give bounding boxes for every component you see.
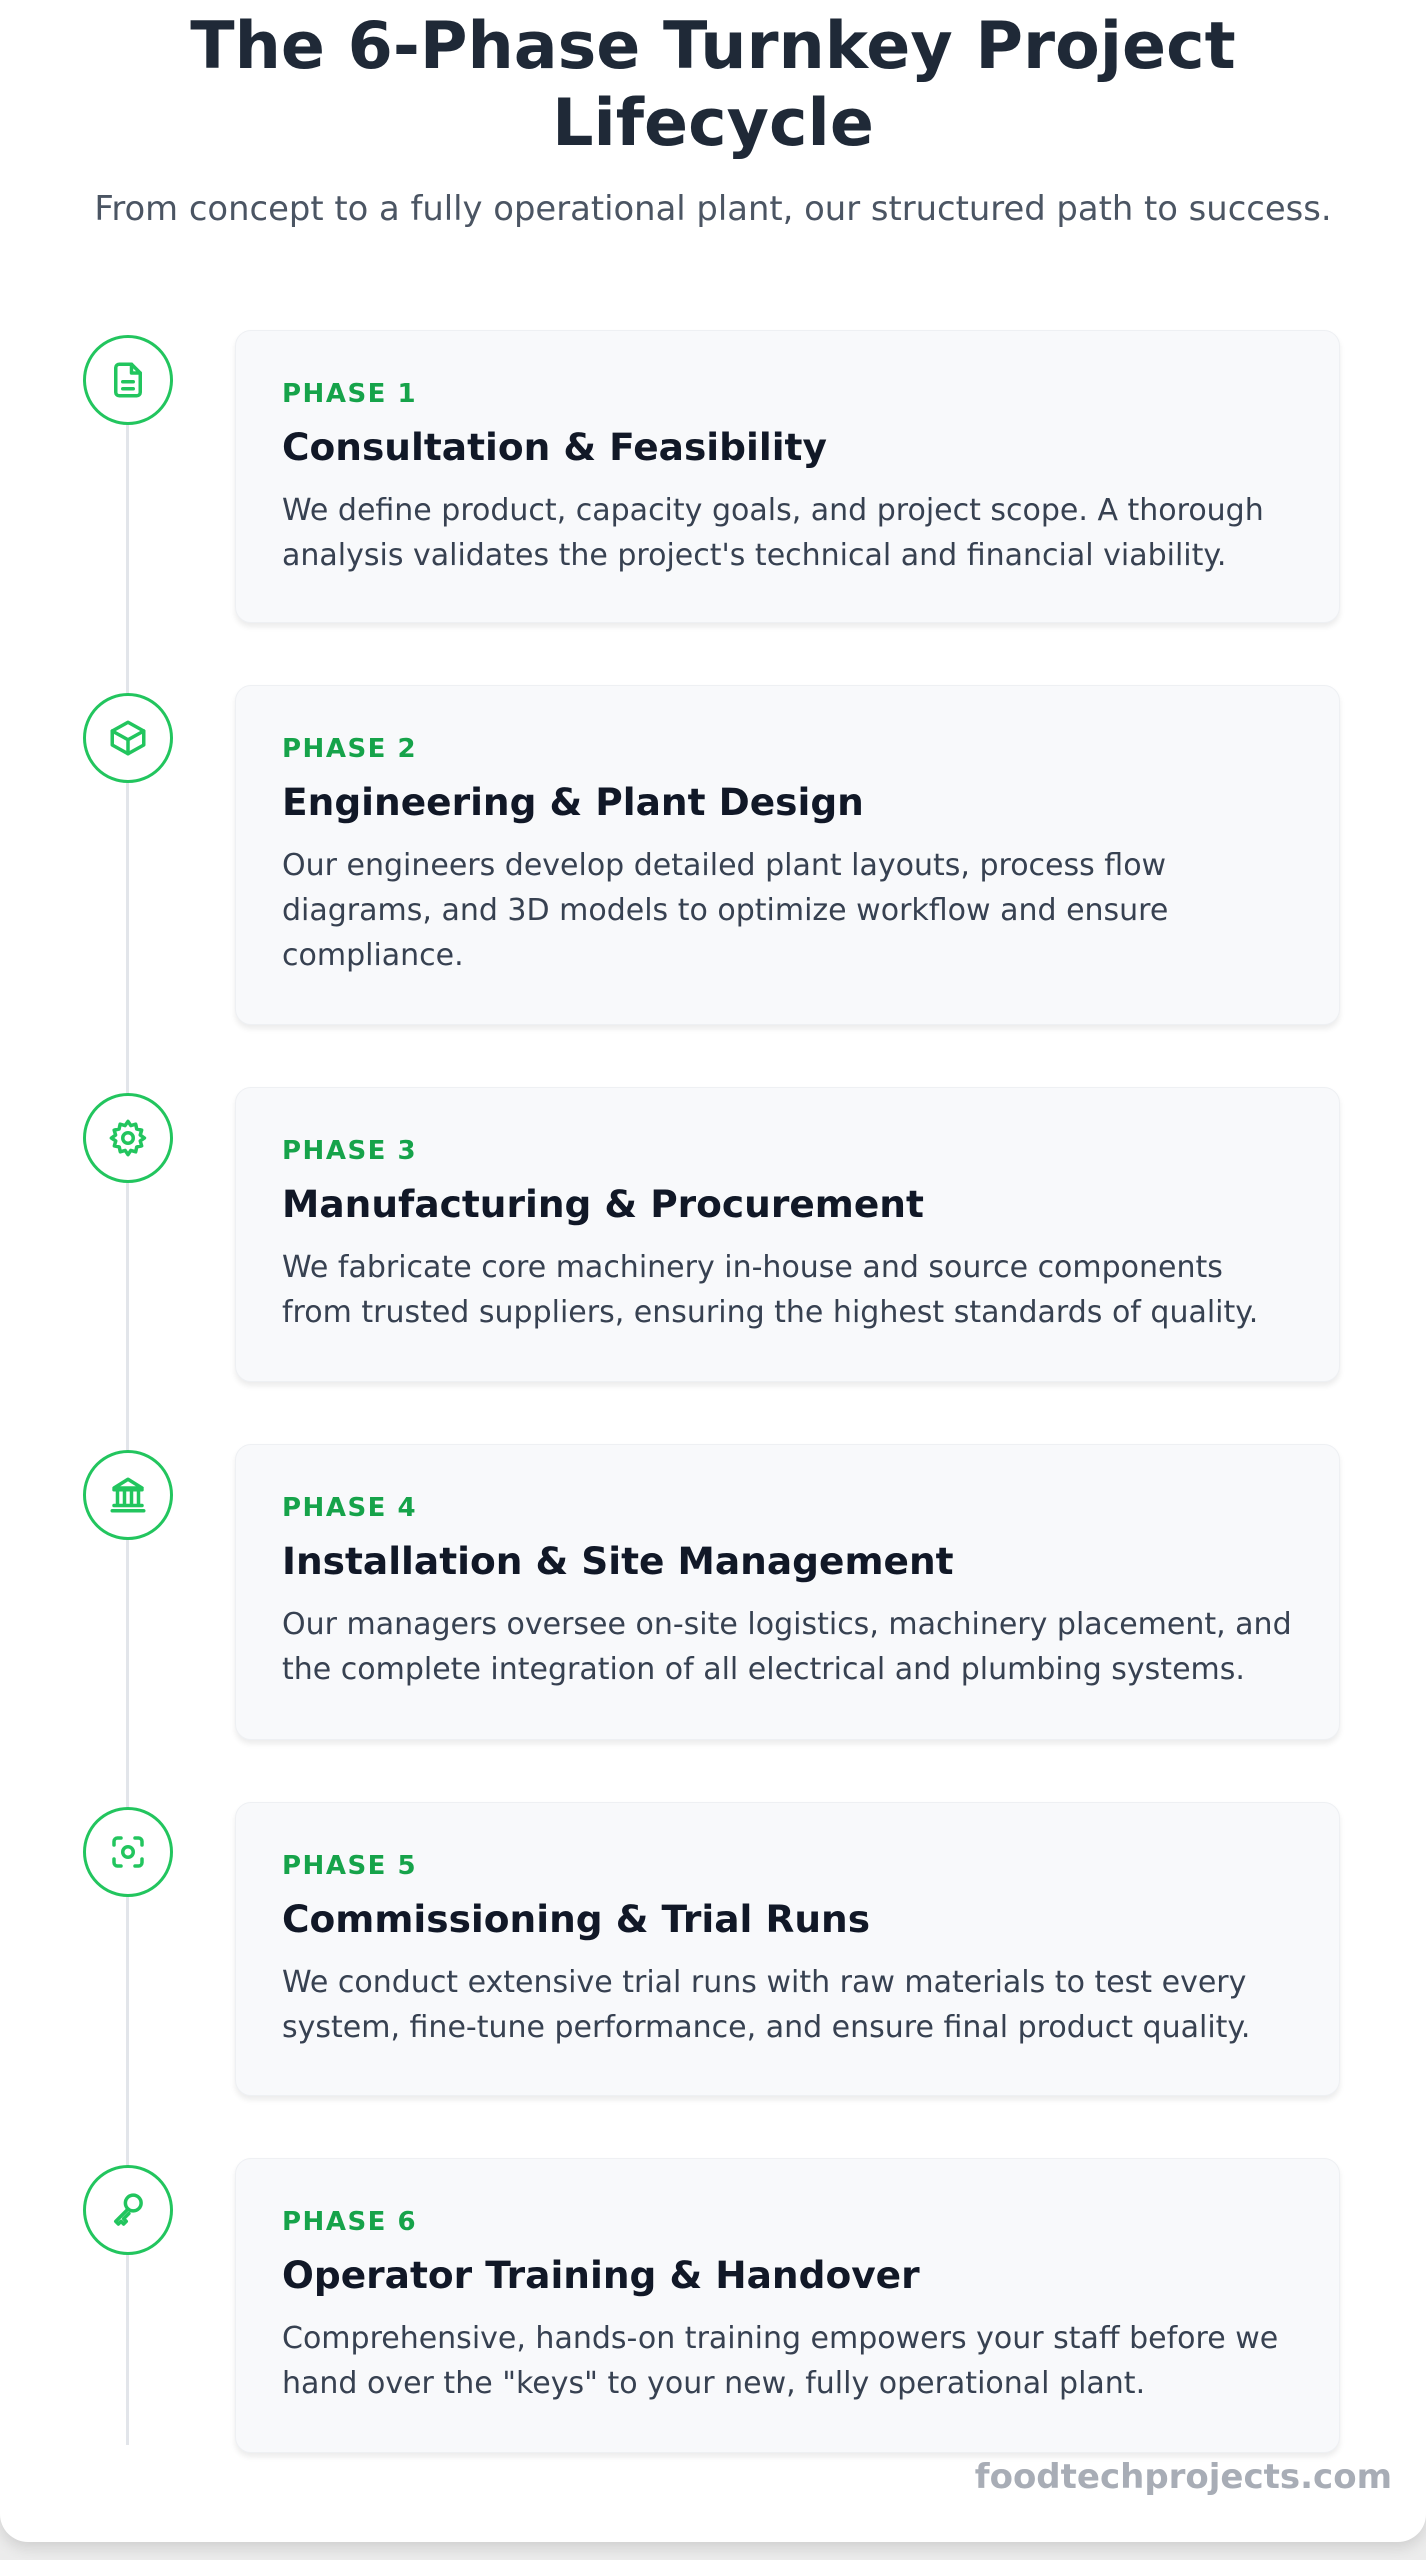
icon: gear — [83, 1093, 173, 1183]
phase 6 heading: Operator Training & Handover — [282, 2253, 920, 2297]
phase 1 text: We define product, capacity goals, and project scope. A thorough analysis validates the project's technical and financial viability. — [282, 493, 1264, 573]
icon: building — [83, 1450, 173, 1540]
phase 2 text: Our engineers develop detailed plant layouts, process flow diagrams, and 3D models to optimize workflow and ensure compliance. — [282, 848, 1168, 973]
icon: document — [83, 335, 173, 425]
timeline line — [126, 380, 129, 2445]
panel: phase 5 — [235, 1802, 1340, 2096]
title: Lifecycle — [552, 86, 874, 161]
phase 3 heading: Manufacturing & Procurement — [282, 1182, 924, 1226]
panel: phase 2 — [235, 685, 1340, 1025]
icon: key — [83, 2165, 173, 2255]
phase 4 heading: Installation & Site Management — [282, 1539, 954, 1583]
icon: box — [83, 693, 173, 783]
panel: phase 1 — [235, 330, 1340, 623]
phase 2 heading: Engineering & Plant Design — [282, 780, 864, 824]
panel: phase 6 — [235, 2158, 1340, 2453]
phase 1 heading: Consultation & Feasibility — [282, 425, 827, 469]
panel: phase 3 — [235, 1087, 1340, 1382]
phase 3 text: We fabricate core machinery in-house and source components from trusted suppliers, ensuring the highest standards of quality. — [282, 1250, 1258, 1330]
phase 5 label: PHASE 5 — [282, 1851, 417, 1881]
phase 4 text: Our managers oversee on-site logistics, machinery placement, and the complete integration of all electrical and plumbing systems. — [282, 1607, 1292, 1687]
phase 5 heading: Commissioning & Trial Runs — [282, 1897, 870, 1941]
phase 2 label: PHASE 2 — [282, 734, 417, 764]
phase 1 label: PHASE 1 — [282, 379, 417, 409]
phase 6 label: PHASE 6 — [282, 2207, 417, 2237]
icon: scan — [83, 1807, 173, 1897]
panel: phase 4 — [235, 1444, 1340, 1740]
title: The 6-Phase Turnkey Project — [190, 9, 1236, 84]
title — [190, 9, 1236, 161]
phase 6 text: Comprehensive, hands-on training empowers your staff before we hand over the "keys" to your new, fully operational plant. — [282, 2321, 1278, 2401]
watermark: foodtechprojects.com — [975, 2457, 1392, 2497]
phase 4 label: PHASE 4 — [282, 1493, 417, 1523]
subtitle: From concept to a fully operational plant, our structured path to success. — [94, 189, 1332, 228]
phase 3 label: PHASE 3 — [282, 1136, 417, 1166]
phase 5 text: We conduct extensive trial runs with raw materials to test every system, fine-tune performance, and ensure final product quality. — [282, 1965, 1250, 2045]
